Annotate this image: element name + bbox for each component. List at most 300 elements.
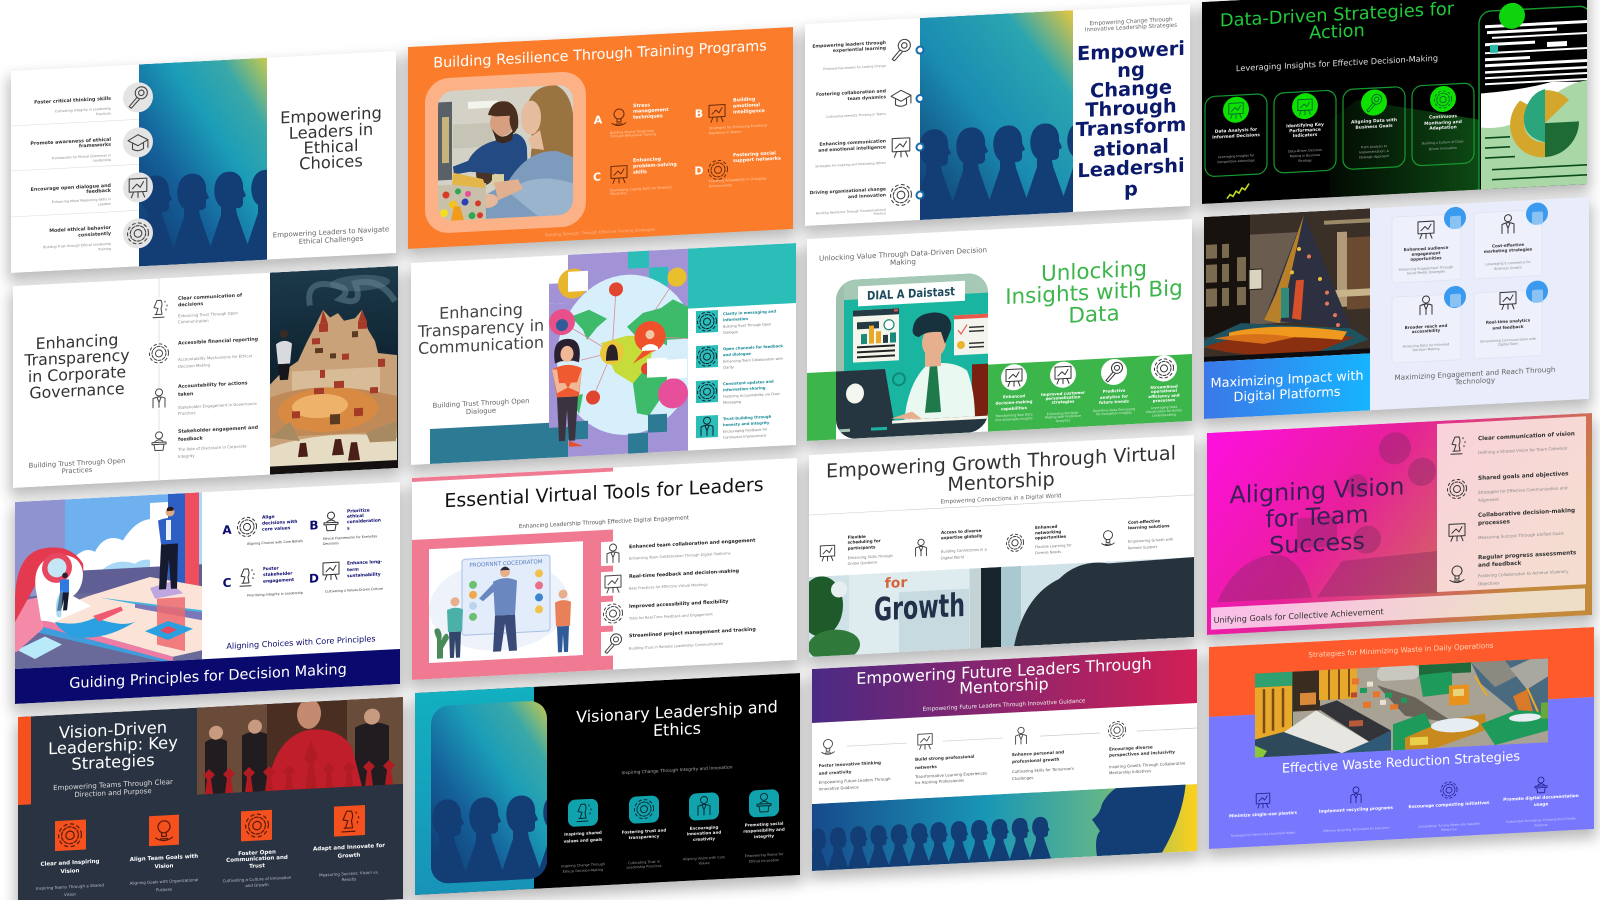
benefit columns: Improved customer bbox=[1041, 390, 1085, 397]
title: Transform bbox=[1076, 113, 1186, 141]
items A to D bbox=[222, 507, 383, 599]
list: alignment items: Clear communication of vision bbox=[1478, 431, 1575, 442]
value icons and text: Fostering trust and bbox=[622, 827, 666, 835]
benefit columns: operational bbox=[1151, 388, 1178, 394]
strategy cards: Results bbox=[342, 876, 356, 882]
list: ethical actions: consistently bbox=[78, 231, 112, 239]
benefit row: Digital World bbox=[941, 555, 964, 560]
top pink strip bbox=[412, 468, 613, 482]
feature cards: Enhancing Engagement Through bbox=[1399, 265, 1453, 272]
title: Mentorship bbox=[959, 674, 1049, 698]
items A to D: skills bbox=[633, 169, 647, 176]
cards: Monitoring and bbox=[1424, 119, 1462, 127]
items A to D: Enhancing bbox=[633, 156, 662, 164]
benefit columns: strategies bbox=[1052, 399, 1075, 405]
list: ethical actions: Building Trust through Ethical Leadership bbox=[43, 242, 111, 249]
strategy cards: and Growth bbox=[245, 882, 269, 888]
value icons and text: Ethical Decision-Making bbox=[563, 868, 603, 874]
value icons and text bbox=[561, 789, 785, 874]
items A to D: B bbox=[695, 107, 703, 121]
orange accent bar bbox=[18, 716, 31, 805]
list: transparency items: honesty and integrity bbox=[723, 420, 770, 427]
items A to D: techniques bbox=[633, 113, 663, 121]
list: leadership actions: and emotional intelligence bbox=[818, 144, 886, 154]
benefit row: participants bbox=[848, 544, 876, 551]
steps: Transformative Learning Experiences bbox=[914, 770, 987, 779]
strategy cards: Communication and bbox=[226, 855, 288, 864]
timeline text bbox=[177, 292, 259, 459]
list: leadership actions: Empowering Leaders for Lasting Change bbox=[823, 64, 886, 71]
panel: Empowering Future Leaders Through Mentorship bbox=[803, 649, 1197, 879]
items A to D: ethical bbox=[347, 513, 364, 520]
decorative zigzags bbox=[1227, 184, 1249, 199]
list: leadership actions: Enhancing communication bbox=[819, 138, 886, 148]
subtitle bbox=[29, 457, 125, 477]
panel: Guiding Principles for Decision Making bbox=[15, 482, 400, 704]
list: ethical actions: Foster critical thinking skills bbox=[34, 96, 111, 106]
items A to D: A bbox=[222, 523, 232, 537]
title: Essential Virtual Tools for Leaders bbox=[444, 474, 764, 512]
items A to D: Resilience in Teams bbox=[709, 130, 741, 135]
list: transparency items: information bbox=[723, 316, 748, 322]
list: ethical actions: Encourage open dialogue and bbox=[31, 183, 112, 193]
title: Transparency bbox=[23, 345, 130, 370]
items A to D: support networks bbox=[733, 156, 781, 164]
panel: Empowering Leaders in Ethical Choices bbox=[11, 51, 396, 273]
gradient panel with silhouettes bbox=[920, 10, 1073, 220]
value icons and text: Inspiring Change Through bbox=[561, 862, 605, 868]
cards: Identifying Key bbox=[1286, 122, 1324, 130]
subtitle bbox=[1085, 17, 1177, 33]
cards: Aligning Data with bbox=[1351, 117, 1397, 125]
cards: Performance bbox=[1289, 127, 1321, 134]
steps: Mentorship Initiatives bbox=[1109, 768, 1151, 775]
list: transparency items bbox=[696, 307, 783, 441]
benefit row: Flexible bbox=[848, 534, 866, 540]
subtitle: Empowering Future Leaders Through Innovative Guidance bbox=[923, 698, 1086, 713]
list: transparency items: Trust-building through bbox=[723, 414, 772, 421]
list: transparency items: Messaging bbox=[723, 400, 741, 405]
benefit row: networking bbox=[1035, 529, 1061, 535]
strategy columns: Sustainable Purchasing: Choosing Eco-Friendly bbox=[1506, 816, 1576, 824]
items A to D: Foster bbox=[263, 565, 280, 572]
list: alignment items: Regular progress assessments bbox=[1478, 550, 1577, 561]
title: Vision-Driven bbox=[59, 718, 167, 742]
title: Leaders in bbox=[289, 120, 373, 143]
list: ethical actions: feedback bbox=[86, 188, 112, 195]
list: alignment items: Fostering Collaboration to Achieve Visionary bbox=[1478, 569, 1569, 578]
timeline text: Enhancing Trust Through Open bbox=[178, 310, 239, 318]
title: Leadershi bbox=[1077, 154, 1185, 182]
title: Data bbox=[1068, 301, 1120, 329]
strategy columns: Implement recycling programs bbox=[1319, 805, 1394, 815]
subtitle: Dialogue bbox=[466, 407, 496, 416]
panel: Vision-Driven Leadership Key Strategies bbox=[18, 694, 403, 900]
cards: Indicators bbox=[1293, 132, 1318, 139]
benefit columns: Visualization for Better bbox=[1146, 408, 1183, 414]
title bbox=[1076, 37, 1186, 203]
strategy columns: Products bbox=[1535, 823, 1548, 827]
feature cards bbox=[1392, 202, 1548, 363]
benefit row: expertise globally bbox=[941, 533, 983, 540]
items A to D: sustainability bbox=[347, 571, 381, 579]
strategy cards: Clear and Inspiring bbox=[41, 859, 100, 868]
teal side block bbox=[415, 687, 534, 895]
value icons and text: innovation and bbox=[687, 830, 721, 836]
items A to D: emotional bbox=[733, 102, 760, 110]
items A to D: D bbox=[694, 164, 704, 178]
items A to D: Through Behavioral Training bbox=[609, 132, 656, 139]
device with dashboard bbox=[1479, 6, 1591, 202]
items A to D: management bbox=[633, 107, 669, 115]
title: Mentorship bbox=[947, 467, 1055, 496]
value icons and text: transparency bbox=[629, 833, 660, 840]
benefit columns: Analytics bbox=[1056, 418, 1071, 423]
list: leadership actions: Fostering collaboration and bbox=[816, 88, 886, 98]
navy footer bar bbox=[15, 649, 400, 704]
title: Choices bbox=[299, 151, 363, 174]
panel: Empowering Growth Through Virtual Mentorship bbox=[799, 435, 1194, 664]
list: alignment items: and feedback bbox=[1478, 561, 1521, 569]
list: transparency items: Fostering Accountability via Clear bbox=[723, 392, 780, 399]
items A to D: B bbox=[309, 518, 319, 533]
benefit columns: future trends bbox=[1099, 398, 1130, 405]
list: leadership actions: Practice bbox=[874, 211, 886, 216]
list: ethical actions: Cultivating Integrity in Leadership bbox=[55, 107, 111, 113]
list: alignment items: processes bbox=[1478, 519, 1511, 527]
strategy columns: Promote digital documentation bbox=[1503, 793, 1579, 803]
green dot bbox=[1499, 2, 1525, 30]
list: virtual tools: Real-time feedback and decision-making bbox=[629, 568, 740, 580]
items A to D: s bbox=[347, 526, 350, 532]
list: transparency items: Enhancing Team Collaboration with bbox=[723, 357, 783, 364]
title: Through bbox=[1085, 94, 1177, 122]
benefit columns: Enhancing Decision- bbox=[1047, 411, 1079, 416]
subtitle: Making bbox=[890, 257, 916, 267]
timeline text: The Role of Disclosure in Corporate bbox=[177, 443, 247, 452]
list: ethical actions: Practices bbox=[96, 111, 111, 116]
strategy cards: Adapt and Innovate for bbox=[313, 843, 385, 853]
panel: Building Resilience Through Training Programs bbox=[408, 27, 793, 249]
title: Success bbox=[1269, 527, 1365, 560]
benefit row: Diverse Needs bbox=[1035, 550, 1061, 555]
cards: Continuous bbox=[1429, 113, 1457, 121]
items A to D: engagement bbox=[263, 577, 294, 585]
feature cards: marketing strategies bbox=[1484, 246, 1533, 254]
title: Visionary Leadership and bbox=[576, 697, 778, 727]
list: leadership actions: experiential learning bbox=[833, 45, 886, 54]
items A to D: Developing Coping Skills for Stressful bbox=[610, 185, 672, 192]
illustration: presenter at board: PROORNNT COCEDRATOM bbox=[469, 559, 543, 569]
benefit columns: Transforming Raw Data bbox=[994, 412, 1033, 418]
items A to D: Environments bbox=[709, 183, 732, 188]
feature cards: Broader reach and bbox=[1405, 323, 1447, 330]
benefit row: Access to diverse bbox=[941, 528, 981, 535]
cards: Business Goals bbox=[1355, 123, 1393, 131]
items A to D: Enhance long- bbox=[347, 559, 382, 567]
icons and connector dots bbox=[891, 38, 924, 206]
strategy columns bbox=[1229, 775, 1579, 843]
items A to D: intelligence bbox=[733, 108, 765, 116]
list: virtual tools: Best Practices for Effective Virtual Meetings bbox=[629, 583, 708, 591]
subtitle: Enhancing Leadership Through Effective Digital Engagement bbox=[519, 515, 690, 530]
feature cards: Analyzing Data for Informed bbox=[1403, 342, 1449, 349]
timeline text: decisions bbox=[178, 301, 203, 308]
steps: Encourage diverse bbox=[1109, 744, 1153, 752]
items A to D bbox=[593, 95, 781, 197]
benefit columns: for Innovation Insights bbox=[1096, 410, 1132, 416]
list: leadership actions bbox=[810, 40, 886, 219]
feature cards: Business Growth bbox=[1494, 265, 1522, 271]
timeline text: Communication bbox=[178, 318, 209, 324]
title: Empowering Growth Through Virtual bbox=[826, 441, 1176, 483]
strategy cards: Growth bbox=[338, 853, 360, 860]
gradient header bbox=[812, 649, 1197, 723]
subtitle: Empowering Connections in a Digital World bbox=[941, 493, 1062, 506]
list: virtual tools: Improved accessibility and flexibility bbox=[629, 599, 729, 610]
title: Insights with Big bbox=[1005, 276, 1183, 310]
list: transparency items: Open channels for feedback bbox=[723, 343, 783, 351]
woman figure bbox=[552, 338, 583, 448]
panel: Empowering Change Through Transformational Leadership bbox=[805, 4, 1190, 226]
title: Strategies bbox=[71, 750, 155, 774]
list: alignment items: Shared goals and objectives bbox=[1478, 471, 1569, 482]
feature cards: and feedback bbox=[1492, 324, 1524, 330]
benefit row: learning solutions bbox=[1128, 523, 1170, 530]
list: ethical actions: Model ethical behavior bbox=[49, 225, 112, 234]
value icons and text: creativity bbox=[693, 836, 715, 842]
title: Building Resilience Through Training Programs bbox=[433, 38, 767, 72]
strategy cards: Vision bbox=[64, 891, 76, 897]
banner: DIAL A Daistast bbox=[867, 284, 955, 303]
items A to D: Stress bbox=[633, 102, 650, 109]
blue title block bbox=[1204, 353, 1370, 419]
list: alignment items: Strategies for Effective Communication and bbox=[1478, 485, 1568, 495]
list: ethical actions: Promote awareness of ethical bbox=[30, 137, 111, 147]
list: transparency items: Clarity in messaging and bbox=[723, 309, 776, 316]
panel: Visionary Leadership and Ethics bbox=[415, 673, 800, 895]
items A to D: Building bbox=[733, 96, 756, 104]
feature cards: Digital Tools bbox=[1498, 342, 1518, 347]
value icons and text: integrity bbox=[754, 833, 774, 839]
list: virtual tools bbox=[601, 534, 756, 656]
dark green wash bbox=[1330, 94, 1479, 197]
title: Maximizing Impact with bbox=[1210, 369, 1364, 392]
title: Change bbox=[1090, 75, 1172, 103]
timeline text: taken bbox=[178, 391, 194, 398]
panel: Data-Driven Strategies for Action bbox=[1202, 0, 1591, 216]
list: leadership actions: Driving organizational change bbox=[810, 186, 886, 196]
strategy columns: Effective Recycling Techniques for Everyone bbox=[1323, 826, 1389, 833]
strategy columns: Composting: Turning Waste into Valuable bbox=[1418, 822, 1480, 829]
steps: Challenges bbox=[1012, 775, 1033, 781]
cards: Driven Innovation bbox=[1429, 146, 1457, 151]
benefit row: Building Connections in a bbox=[941, 547, 987, 554]
subtitle: Technology bbox=[1454, 375, 1496, 387]
title: Digital Platforms bbox=[1234, 385, 1341, 405]
subtitle bbox=[1395, 365, 1555, 390]
panel: Enhancing Transparency in Communication bbox=[411, 243, 796, 465]
faint gears and team photo bbox=[1217, 430, 1437, 604]
strategy columns: Minimize single-use plastics bbox=[1229, 810, 1297, 819]
cards: Making in Business bbox=[1290, 153, 1321, 158]
items A to D: core values bbox=[262, 525, 291, 533]
subtitle: Strategies for Minimizing Waste in Daily Operations bbox=[1308, 641, 1494, 659]
items A to D: Fostering social bbox=[733, 150, 776, 159]
photo: Growth window: for bbox=[885, 575, 907, 592]
title: Empowering bbox=[280, 103, 382, 127]
subtitle: Practices bbox=[62, 466, 93, 475]
timeline line bbox=[158, 278, 160, 480]
title: Empowering Future Leaders Through bbox=[856, 654, 1152, 688]
feature cards: Streamlining Communication with bbox=[1480, 337, 1536, 344]
list: alignment items: Defining a Shared Vision for Team Cohesion bbox=[1478, 445, 1568, 455]
steps: perspectives and inclusivity bbox=[1109, 749, 1175, 758]
title bbox=[576, 697, 778, 744]
items A to D: Cultivating a Values-Driven Culture bbox=[325, 587, 383, 594]
world map illustration bbox=[549, 248, 708, 458]
benefit row: Empowering Growth with bbox=[1128, 537, 1173, 544]
title: Aligning Vision bbox=[1230, 472, 1404, 509]
benefit columns: Streamlined bbox=[1150, 384, 1178, 390]
title: Guiding Principles for Decision Making bbox=[69, 662, 347, 692]
benefit row: Flexible Learning for bbox=[1035, 543, 1072, 549]
title: Empoweri bbox=[1077, 37, 1185, 65]
steps: and creativity bbox=[819, 769, 852, 776]
title: in Corporate bbox=[28, 362, 126, 386]
value icons and text: Values bbox=[698, 861, 710, 866]
items A to D: D bbox=[309, 571, 319, 586]
benefit columns: decision-making bbox=[996, 399, 1033, 406]
strategy columns: Strategies for Minimizing Household Waste bbox=[1231, 831, 1295, 838]
steps: Innovative Guidance bbox=[819, 784, 859, 791]
subtitle: Unlocking Value Through Data-Driven Decision bbox=[819, 245, 987, 263]
subtitle: Empowering Change Through bbox=[1089, 17, 1173, 27]
connector lines bbox=[847, 728, 1197, 746]
title bbox=[826, 441, 1176, 502]
benefit columns: capabilities bbox=[1001, 405, 1028, 411]
value icons and text: values and goals bbox=[564, 837, 603, 844]
strategy cards bbox=[36, 804, 385, 899]
panel: Enhancing Transparency in Corporate Governance bbox=[13, 266, 398, 488]
benefit columns: Leveraging Data bbox=[1151, 405, 1177, 410]
items A to D: stakeholder bbox=[263, 571, 293, 578]
feature cards: accessibility bbox=[1412, 328, 1441, 334]
benefit row: scheduling for bbox=[848, 538, 881, 545]
value icons and text: Encouraging bbox=[690, 824, 718, 831]
benefit row: Cost-effective bbox=[1128, 518, 1160, 525]
list: leadership actions: Cultivating Interests Thinking in Teams bbox=[826, 112, 886, 119]
benefit columns: Real-Time Data Processing bbox=[1093, 407, 1135, 413]
items A to D: A bbox=[594, 113, 603, 127]
benefit row: Remote Support bbox=[1128, 545, 1158, 550]
illustration: strategy board and pin bbox=[15, 492, 202, 669]
steps: Foster innovative thinking bbox=[819, 760, 881, 768]
benefit columns: Making with Predictive bbox=[1045, 414, 1081, 420]
illustration: presenter at board bbox=[429, 541, 583, 663]
feature cards: Cost-effective bbox=[1492, 242, 1524, 249]
timeline text: Accessible financial reporting bbox=[178, 336, 259, 347]
cards: Leveraging Insights for bbox=[1218, 153, 1255, 159]
title: ng bbox=[1117, 58, 1145, 82]
subtitle: Aligning Choices with Core Principles bbox=[226, 633, 376, 651]
items A to D: Fostering Adaptability in Changing bbox=[709, 176, 766, 183]
list: ethical actions: Training bbox=[97, 247, 111, 252]
title bbox=[48, 717, 178, 775]
photo: Growth window bbox=[809, 557, 1194, 657]
subtitle: Empowering Leaders to Navigate bbox=[273, 225, 389, 239]
footer strip bbox=[1211, 588, 1585, 630]
benefit columns: efficiency and bbox=[1148, 393, 1180, 399]
translucent list panel bbox=[1437, 416, 1586, 592]
list: virtual tools: Enhancing Team Collaboration Through Digital Platforms bbox=[629, 551, 731, 561]
cards: Strategic Approach bbox=[1359, 154, 1389, 160]
list: transparency items: Building Trust Through Open bbox=[723, 322, 771, 329]
footer: Building Strength Through Effective Training Strategies bbox=[545, 227, 655, 237]
items A to D: C bbox=[593, 170, 601, 184]
list: leadership actions: and innovation bbox=[848, 192, 886, 200]
benefit row: Enhancing Skills Through bbox=[848, 554, 893, 560]
cards bbox=[1205, 83, 1474, 177]
cards: Informed Decisions bbox=[1212, 132, 1260, 141]
title bbox=[23, 329, 130, 403]
photo: leader with chess pieces bbox=[197, 697, 403, 795]
cards: Strategy bbox=[1298, 158, 1312, 163]
benefit columns: into Actionable Insights bbox=[995, 416, 1033, 422]
items A to D: Building Mental Toughness bbox=[610, 129, 654, 135]
value icons and text: Ethical Innovation bbox=[749, 858, 779, 864]
title: Governance bbox=[29, 379, 125, 403]
title: Action bbox=[1309, 20, 1365, 44]
strategy cards: Vision bbox=[61, 868, 80, 875]
steps: for Aspiring Professionals bbox=[915, 778, 964, 785]
items A to D: Prioritizing Integrity in Leadership bbox=[247, 591, 303, 598]
benefit columns: personalization bbox=[1046, 394, 1081, 401]
panel: Maximizing Impact with Digital Platforms bbox=[1204, 197, 1589, 419]
subtitle: Inspiring Change Through Integrity and Innovation bbox=[621, 764, 733, 776]
timeline text: feedback bbox=[178, 436, 204, 443]
strategy cards: Cultivating a Culture of Innovation bbox=[223, 875, 292, 883]
strategy cards: Align Team Goals with bbox=[130, 854, 198, 863]
feature cards: Decision-Making bbox=[1412, 347, 1440, 352]
list: transparency items: Clarity bbox=[723, 365, 734, 370]
list: leadership actions: Strategies for Inspiring and Motivating Others bbox=[815, 161, 886, 168]
title: Leadership: Key bbox=[48, 733, 178, 758]
subtitle: Building Trust Through Open bbox=[433, 397, 529, 410]
subtitle: Unifying Goals for Collective Achievement bbox=[1214, 606, 1384, 625]
value icons and text: responsibility and bbox=[743, 827, 785, 834]
photo: Growth window: Growth bbox=[874, 586, 965, 629]
list: leadership actions: Empowering leaders through bbox=[812, 40, 886, 50]
benefit columns: Understanding bbox=[1152, 413, 1176, 418]
strategy columns: Encourage composting initiatives bbox=[1409, 800, 1490, 810]
strategy cards: Purpose bbox=[156, 886, 173, 892]
steps: professional growth bbox=[1012, 757, 1059, 764]
benefit row: Enhanced bbox=[1035, 524, 1057, 530]
title bbox=[856, 654, 1152, 703]
panel: Effective Waste Reduction Strategies bbox=[1209, 627, 1594, 849]
timeline text: Stakeholder Engagement in Governance bbox=[178, 401, 257, 410]
value icons and text: Leadership Practices bbox=[626, 864, 662, 870]
steps: networks bbox=[915, 764, 937, 770]
list: ethical actions: Enhancing Moral Reasoning Skills in bbox=[52, 197, 111, 204]
title: for Team bbox=[1265, 500, 1369, 533]
subtitle: Direction and Purpose bbox=[74, 787, 152, 799]
list: leadership actions: Building Resilience Through Transformational bbox=[816, 208, 886, 215]
list: alignment items: Collaborative decision-making bbox=[1478, 508, 1575, 519]
gradient image with silhouettes bbox=[812, 784, 1197, 871]
items A to D: Aligning Choices with Core Beliefs bbox=[247, 539, 303, 546]
